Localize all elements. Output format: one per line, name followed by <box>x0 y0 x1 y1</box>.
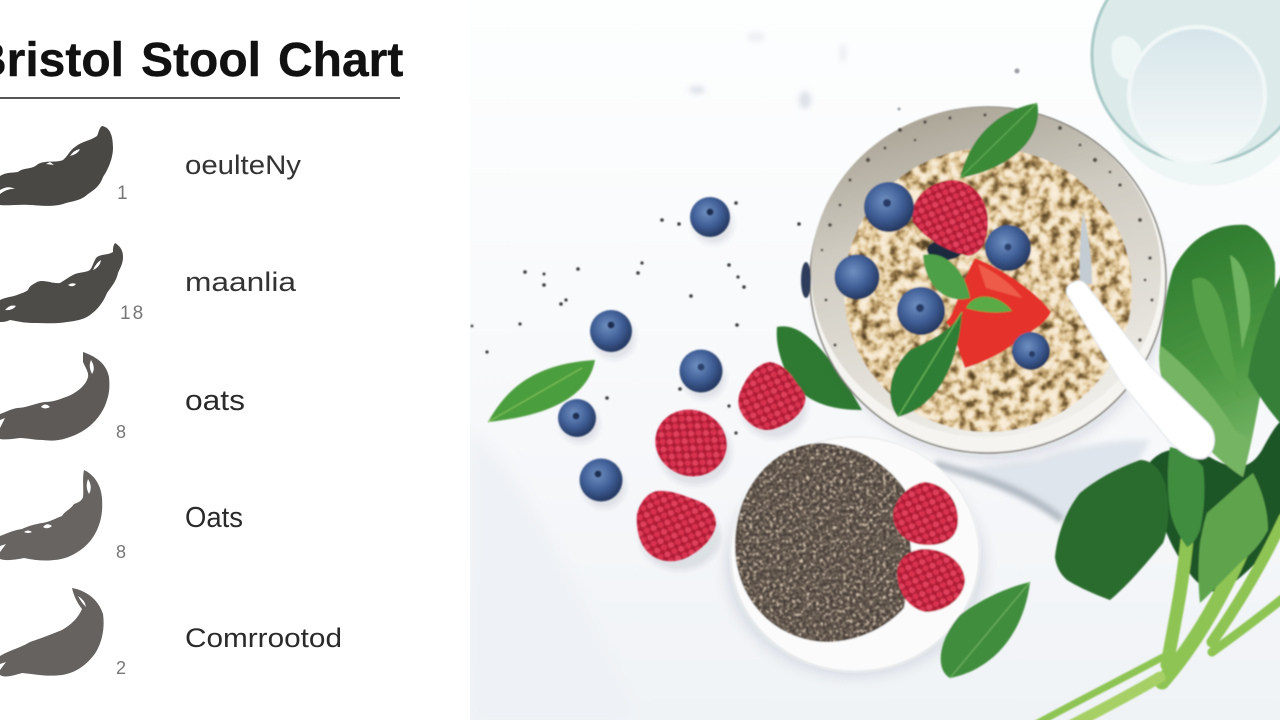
dark blueberry peeking behind bowl <box>801 262 811 298</box>
row 1: stool type <box>0 126 302 206</box>
spinach big leaf highlights <box>1159 255 1250 477</box>
spinach dark background foliage <box>1150 420 1280 592</box>
spinach mid leaf <box>1168 447 1204 547</box>
title: Stool <box>141 34 261 87</box>
glass of water <box>1092 0 1280 186</box>
blueberries in bowl <box>834 182 1050 370</box>
bowl speckles <box>821 113 1154 347</box>
left panel background <box>0 0 470 720</box>
loose leaf <box>488 360 595 422</box>
spinach bunch <box>1036 225 1280 720</box>
main bowl with oats <box>801 107 1166 457</box>
loose blueberries <box>558 197 730 502</box>
centre mint leaves <box>923 254 1012 312</box>
row 5: stool type <box>0 588 342 678</box>
icon: stool shape 1 <box>0 126 113 206</box>
oats <box>844 148 1132 432</box>
title underline <box>0 97 400 99</box>
label: row 3: oats <box>185 385 245 417</box>
raspberries in chia bowl <box>893 482 965 612</box>
icon: stool shape 5 <box>0 588 104 676</box>
dark leaf behind bowl <box>777 326 862 410</box>
label: row 4: Oats <box>185 502 243 534</box>
spinach right leaf <box>1248 273 1280 425</box>
shadows under loose fruit <box>561 204 807 570</box>
dark shadow under raspberry <box>927 240 963 260</box>
number: row 3: 8 <box>116 422 126 442</box>
loose raspberries <box>637 362 805 561</box>
spinach right lower leaf <box>1198 473 1268 603</box>
label: row 2: maanlia <box>185 267 297 297</box>
label: row 1: oeulteNy <box>185 150 302 180</box>
chia seeds <box>735 443 912 642</box>
bottom leaf by chia bowl <box>941 582 1030 678</box>
row 2: stool type <box>0 243 297 324</box>
raspberry in bowl <box>912 180 988 256</box>
spoon <box>1066 212 1214 459</box>
icon: stool shape 2 <box>0 243 123 323</box>
chia bowl <box>727 437 983 675</box>
spinach stems <box>1036 518 1280 720</box>
photo: healthy food on marble <box>470 0 1280 720</box>
bottom mint leaf <box>890 312 962 417</box>
number: row 4: 8 <box>116 542 126 562</box>
top mint leaf <box>960 103 1038 178</box>
number: row 1: 1 <box>117 183 128 204</box>
scattered chia seeds <box>471 201 801 435</box>
number: row 2: 18 <box>120 303 145 324</box>
icon: stool shape 4 <box>0 470 102 560</box>
row 3: stool type <box>0 352 245 442</box>
title: Chart <box>278 34 403 87</box>
strawberry <box>946 258 1051 368</box>
row 4: stool type <box>0 470 243 562</box>
icon: stool shape 3 <box>0 352 109 441</box>
spinach big top leaf <box>1159 225 1275 477</box>
number: row 5: 2 <box>116 658 126 678</box>
spinach lower dark leaf <box>1055 460 1168 600</box>
label: row 5: Comrrootod <box>185 623 342 653</box>
